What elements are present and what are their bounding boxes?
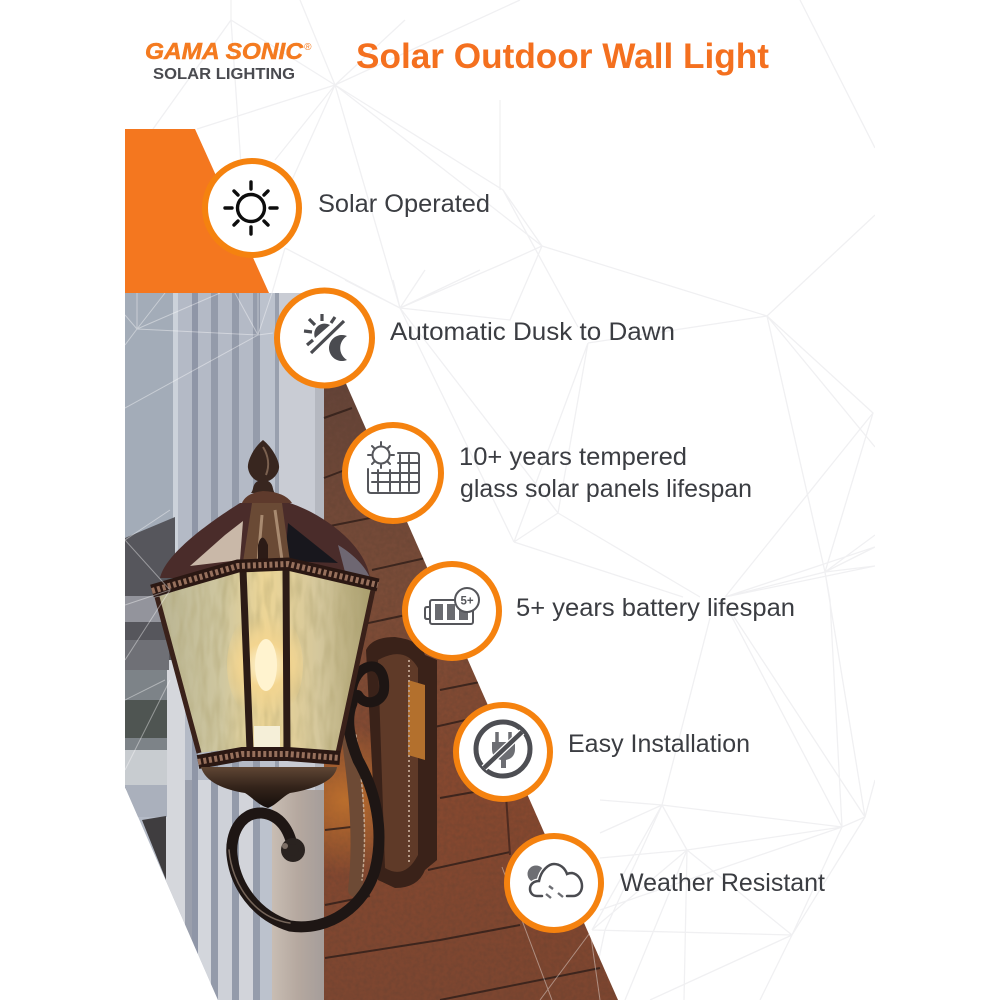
faint mesh over photo	[125, 293, 600, 1000]
feature: battery	[405, 564, 795, 658]
icon: sun	[205, 161, 299, 255]
orange corner banner	[125, 129, 269, 293]
window at left	[125, 517, 175, 880]
icon: sun and moon	[277, 290, 372, 386]
lantern photo	[125, 293, 634, 1000]
logo wordmark: GAMA SONIC	[145, 38, 303, 64]
label: Easy Installation	[568, 730, 750, 758]
registered mark: ®	[304, 42, 312, 53]
icon: no plug	[456, 705, 550, 799]
finial	[248, 440, 279, 493]
curved lantern arm	[229, 666, 384, 927]
feature: weather resistant	[507, 836, 825, 930]
roof	[160, 503, 370, 578]
glass frame	[243, 568, 287, 750]
label	[459, 443, 752, 503]
bottom bowl	[201, 767, 337, 808]
feature: easy installation	[456, 705, 750, 799]
title: Solar Outdoor Wall Light	[356, 37, 769, 76]
line 2: glass solar panels lifespan	[460, 475, 752, 503]
label: Solar Operated	[318, 190, 490, 218]
feature: solar panels	[345, 425, 752, 521]
logo	[145, 38, 312, 83]
brick wall	[324, 384, 618, 1000]
glass body	[157, 569, 373, 753]
label: Automatic Dusk to Dawn	[390, 318, 675, 346]
logo tagline: SOLAR LIGHTING	[153, 66, 295, 83]
icon: battery: 5+	[460, 596, 474, 608]
background mesh pattern	[153, 0, 875, 1000]
icon: solar panel	[345, 425, 441, 521]
feature: dusk to dawn	[277, 290, 675, 386]
siding wall	[125, 293, 325, 1000]
icon: battery	[405, 564, 499, 658]
wall mounting plate	[366, 637, 437, 888]
label: 5+ years battery lifespan	[516, 594, 795, 622]
label: Weather Resistant	[620, 869, 825, 897]
feature: solar operated	[205, 161, 490, 255]
icon: cloud with rain	[507, 836, 601, 930]
bottom beaded rim	[198, 754, 340, 762]
lantern	[150, 440, 380, 808]
top beaded rim	[152, 564, 378, 591]
line 1: 10+ years tempered	[459, 443, 687, 471]
